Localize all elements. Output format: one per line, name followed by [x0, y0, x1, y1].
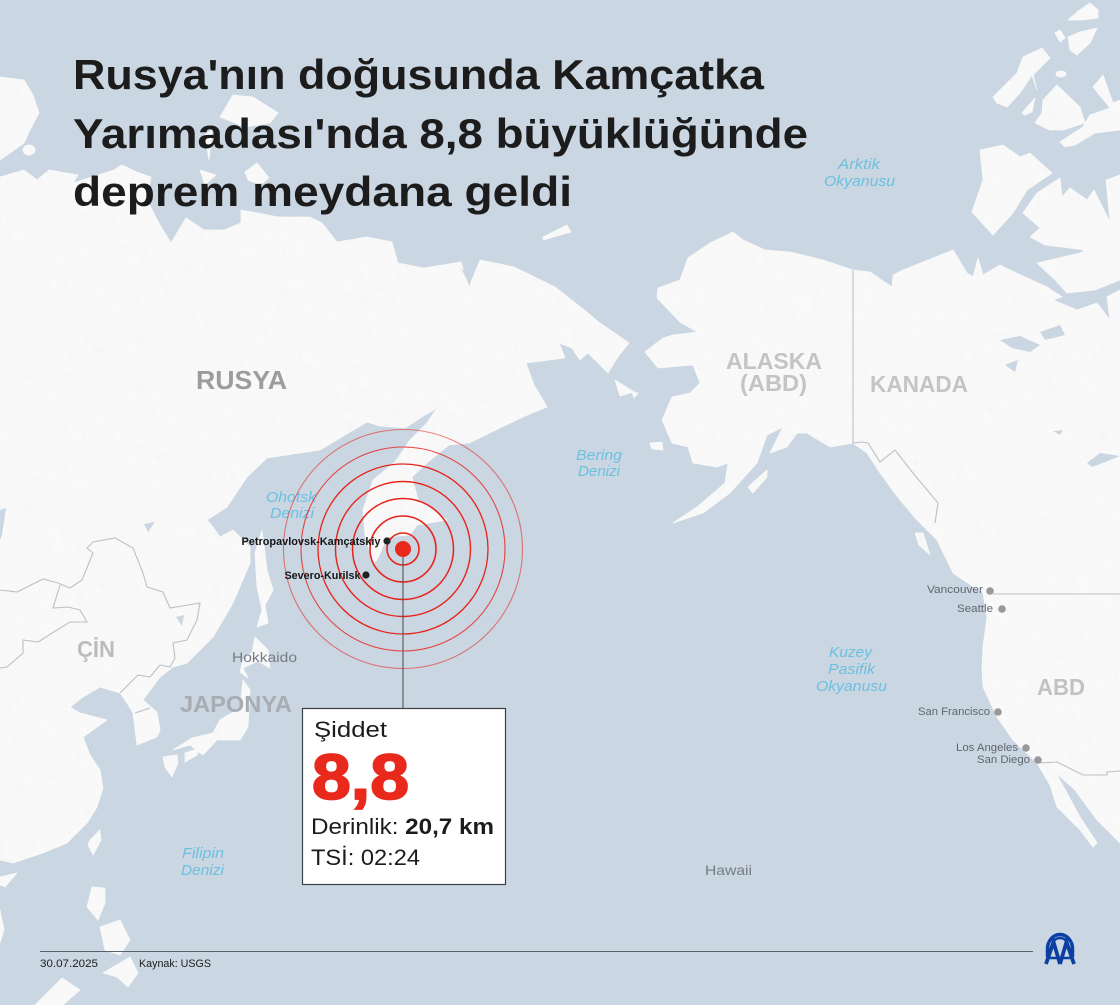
label: Kuzey Pasifik Okyanusu: Okyanusu [816, 678, 888, 695]
label: ABD: ABD [1037, 674, 1085, 700]
title: Yarımadası'nda 8,8 büyüklüğünde [73, 110, 808, 157]
sea labels [181, 156, 896, 879]
city: Seattle: Seattle [957, 603, 993, 615]
label: Arktik Okyanusu: Arktik [837, 156, 882, 173]
label: Alaska ABD: (ABD) [740, 370, 807, 396]
city: San Francisco: San Francisco [918, 706, 990, 718]
time: TSİ: 02:24 [311, 845, 420, 870]
label: Ohotsk Denizi [266, 489, 318, 522]
city: Vancouver: Vancouver [927, 584, 983, 596]
place labels [232, 649, 752, 878]
label: Japonya: JAPONYA [180, 691, 292, 717]
lakes [0, 268, 1120, 626]
title [73, 51, 808, 215]
city: San Diego: San Diego [977, 754, 1030, 766]
epicenter marker [395, 541, 411, 557]
earthquake shock rings [284, 430, 522, 668]
label: Çin: ÇİN [77, 636, 115, 662]
source: Kaynak: USGS [139, 958, 211, 970]
callout: earthquake details [302, 708, 506, 884]
US west coast cities [918, 584, 1042, 766]
borders [0, 270, 1120, 775]
label: Kuzey Pasifik Okyanusu: Pasifik [828, 661, 877, 678]
city: Petropavlovsk-Kamçatskiy: Petropavlovsk-Kamçatskiy [242, 536, 381, 548]
label: Arktik Okyanusu [824, 156, 896, 190]
label: Rusya: RUSYA [196, 365, 287, 395]
label: Ohotsk Denizi: Denizi [270, 505, 315, 522]
label: Hokkaido: Hokkaido [232, 649, 297, 665]
date: 30.07.2025 [40, 958, 98, 970]
label: Filipin Denizi: Denizi [181, 862, 225, 879]
label: Alaska ABD: ALASKA [726, 348, 822, 374]
title: deprem meydana geldi [73, 168, 572, 215]
icon: AA logo [1046, 934, 1074, 964]
label: Bering Denizi [576, 447, 623, 480]
label: Arktik Okyanusu: Okyanusu [824, 173, 896, 190]
depth: Derinlik: 20,7 km [311, 814, 494, 839]
label: Hawaii: Hawaii [705, 862, 752, 878]
label: Kuzey Pasifik Okyanusu [816, 644, 888, 695]
country labels [77, 348, 1085, 717]
label: Filipin Denizi: Filipin [182, 845, 224, 862]
city: Severo-Kurilsk: Severo-Kurilsk [284, 570, 361, 582]
label: Kanada: KANADA [870, 371, 968, 397]
label: Alaska ABD [726, 348, 822, 396]
label: Şiddet: Şiddet [314, 717, 387, 742]
label: Kuzey Pasifik Okyanusu: Kuzey [829, 644, 874, 661]
magnitude value: 8,8 [312, 741, 409, 813]
label: Bering Denizi: Bering [576, 447, 623, 464]
footer rule [40, 950, 1033, 952]
label: Bering Denizi: Denizi [578, 463, 621, 480]
label: Ohotsk Denizi: Ohotsk [266, 489, 318, 506]
connector line [402, 556, 404, 708]
title: Rusya'nın doğusunda Kamçatka [73, 51, 765, 98]
label: Filipin Denizi [181, 845, 225, 879]
city: Los Angeles: Los Angeles [956, 742, 1019, 754]
